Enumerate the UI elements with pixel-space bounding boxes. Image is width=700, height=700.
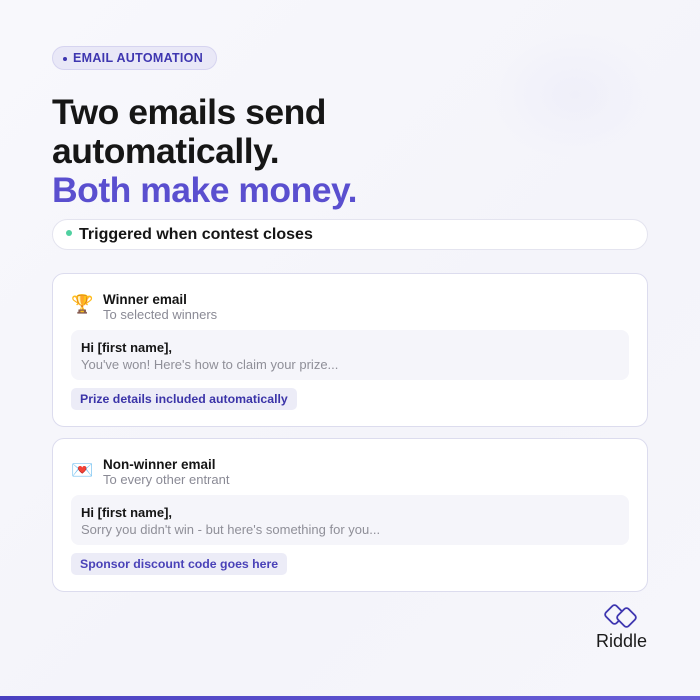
panel: non-winner email [52,438,648,592]
title: automatically. [52,131,279,171]
non-winner tag [71,553,287,575]
winner email preview: Hi [first name], [81,340,172,355]
logo: Riddle [596,604,647,651]
trigger pill: Triggered when contest closes [79,226,313,243]
winner email preview [71,330,629,380]
title: Two emails send [52,92,326,132]
winner title: Winner email [103,292,187,307]
badge: email automation [52,46,217,70]
non-winner email preview: Hi [first name], [81,505,172,520]
title: Both make money. [52,170,357,210]
non-winner subtitle: To every other entrant [103,472,229,487]
title [52,92,357,210]
winner email preview: You've won! Here's how to claim your prize... [81,357,338,372]
logo: Riddle: Riddle [596,631,647,651]
panel: winner email [52,273,648,427]
non-winner tag: Sponsor discount code goes here [80,557,278,571]
trigger pill [52,219,648,250]
icon: trophy: 🏆 [71,294,93,315]
winner tag: Prize details included automatically [80,392,288,406]
icon: love letter: 💌 [71,460,93,481]
non-winner email preview [71,495,629,545]
non-winner title: Non-winner email [103,457,216,472]
non-winner email preview: Sorry you didn't win - but here's something for you... [81,522,380,537]
winner tag [71,388,297,410]
badge: email automation: EMAIL AUTOMATION [73,51,203,65]
winner subtitle: To selected winners [103,307,217,322]
